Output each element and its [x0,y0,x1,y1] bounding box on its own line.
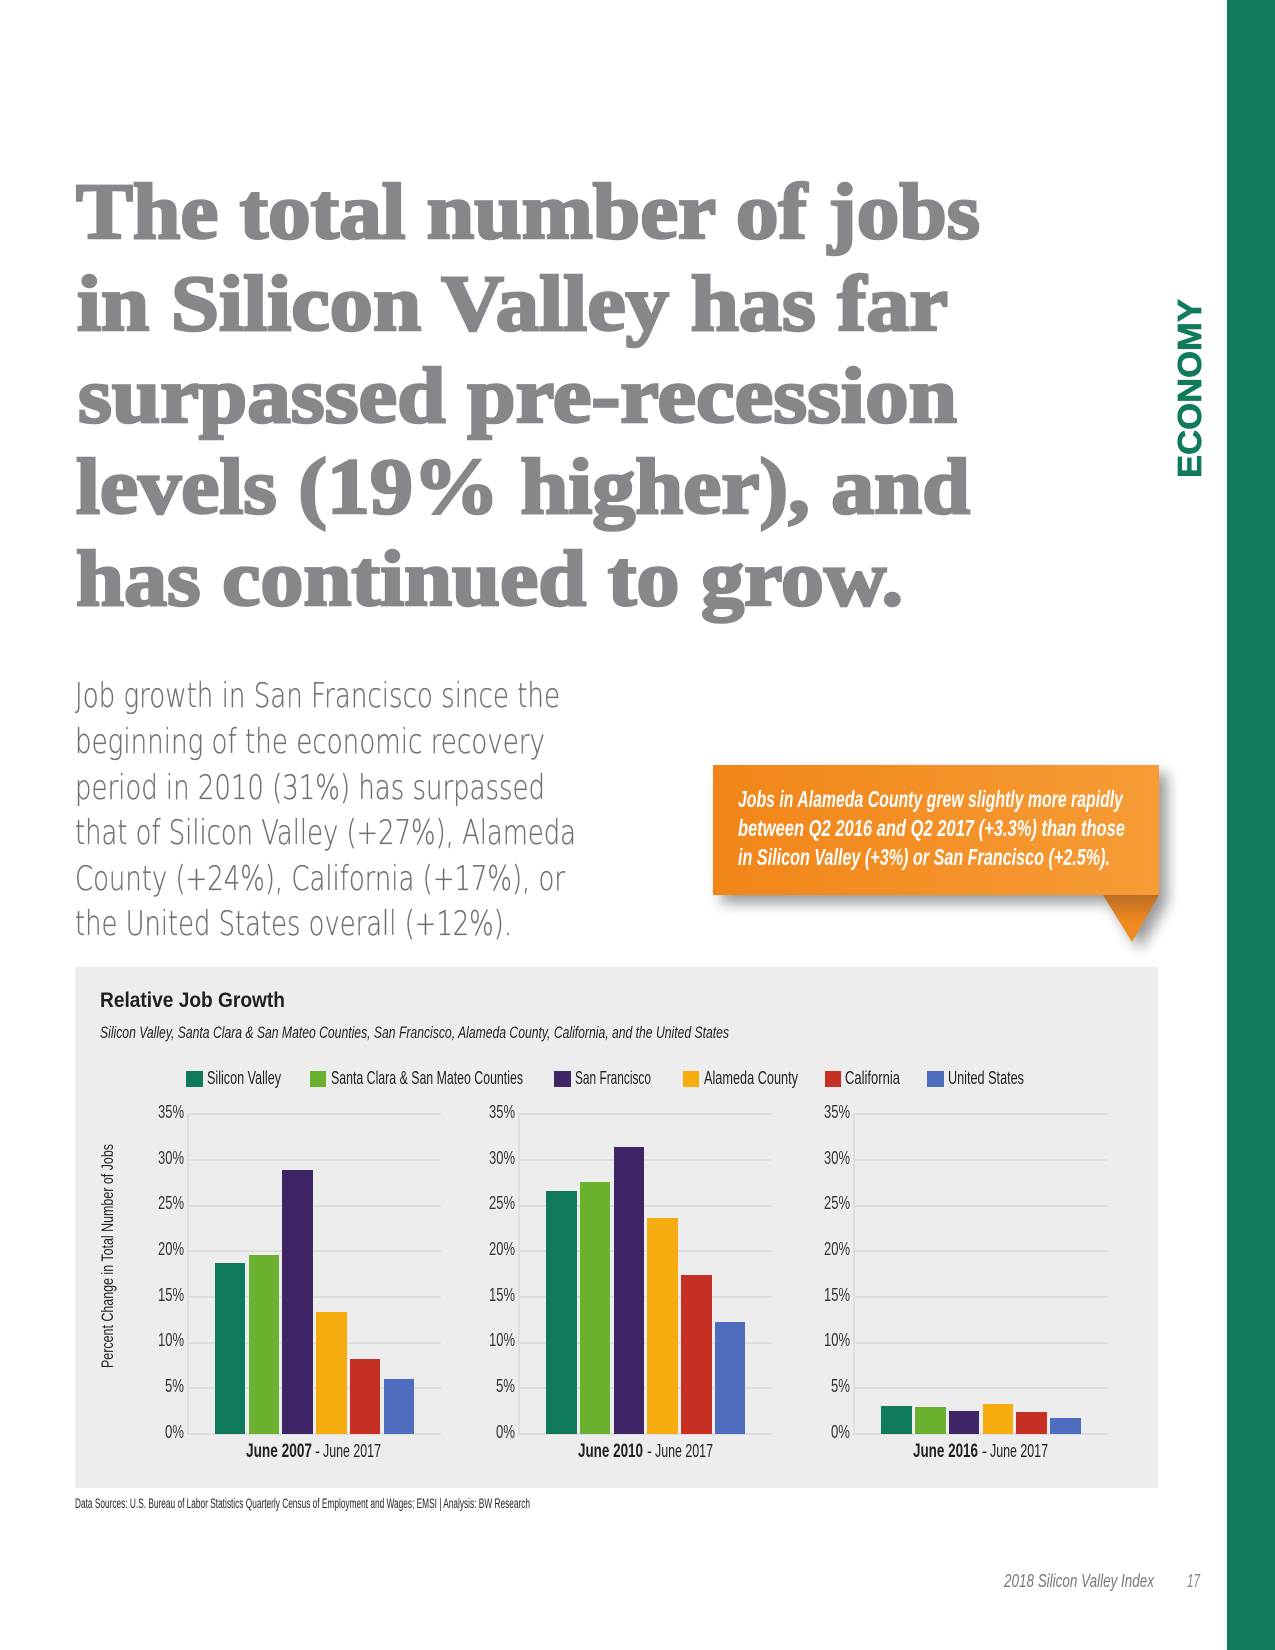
bar chart: June 2010 - June 2017: - [647,1441,652,1461]
data sources note: Data Sources: U.S. Bureau of Labor Statistics Quarterly Census of Employment and Wages; EMSI | Analysis: BW Research [75,1496,530,1511]
callout [713,765,1167,950]
bar chart: June 2007 - June 2017: - [315,1441,320,1461]
bar chart: June 2016 - June 2017: June 2016 [913,1441,978,1462]
bar chart: June 2016 - June 2017: 5% [831,1376,850,1396]
bar chart: June 2010 - June 2017: 0% [496,1422,515,1442]
bar chart: June 2007 - June 2017: 5% [165,1376,184,1396]
body text: County (+24%), California (+17%), or [75,859,565,899]
body text [75,676,576,944]
bars: 2007 [215,1170,414,1434]
bar chart: June 2016 - June 2017: 25% [824,1193,850,1213]
bar chart: June 2016 - June 2017: 35% [824,1102,850,1122]
body text: beginning of the economic recovery [75,722,545,762]
chart title: Relative Job Growth [100,989,285,1012]
section label: ECONOMY: ECONOMY [1171,299,1208,478]
bar chart: June 2010 - June 2017: 10% [489,1330,515,1350]
legend: United States [948,1068,1024,1088]
bar chart: June 2010 - June 2017 [489,1102,772,1462]
headline: in Silicon Valley has far [77,261,948,348]
footer: publication name: 2018 Silicon Valley Index [1003,1571,1155,1591]
legend: Alameda County [704,1068,798,1088]
bar chart: June 2016 - June 2017: 20% [824,1239,850,1259]
panel: chart background [75,967,1158,1488]
sidebar: green band [1227,0,1275,1650]
legend: Silicon Valley [207,1068,281,1088]
headline: levels (19% higher), and [76,444,970,531]
footer: page number: 17 [1187,1571,1201,1591]
callout: in Silicon Valley (+3%) or San Francisco (+2.5%). [738,844,1110,870]
bar chart: June 2007 - June 2017: 30% [158,1148,184,1168]
bar chart: June 2016 - June 2017: - [982,1441,987,1461]
bar chart: June 2007 - June 2017: June 2017 [323,1441,381,1461]
body text: that of Silicon Valley (+27%), Alameda [75,813,576,853]
bars: 2016 [881,1404,1081,1434]
headline: The total number of jobs [76,169,980,256]
legend [186,1068,1024,1088]
bar chart: June 2007 - June 2017: 35% [158,1102,184,1122]
body text: the United States overall (+12%). [75,904,512,944]
bar chart: June 2010 - June 2017: 35% [489,1102,515,1122]
bar chart: June 2007 - June 2017 [158,1102,441,1462]
callout: between Q2 2016 and Q2 2017 (+3.3%) than those [738,815,1125,841]
bar chart: June 2010 - June 2017: 30% [489,1148,515,1168]
body text: period in 2010 (31%) has surpassed [75,768,545,808]
bar chart: June 2010 - June 2017: 20% [489,1239,515,1259]
bar chart: June 2016 - June 2017: June 2017 [990,1441,1048,1461]
headline [76,169,980,623]
bar chart: June 2007 - June 2017: 25% [158,1193,184,1213]
bar chart: June 2016 - June 2017: 30% [824,1148,850,1168]
bar chart: June 2010 - June 2017: 25% [489,1193,515,1213]
bar chart: June 2016 - June 2017 [824,1102,1108,1462]
bar chart: June 2007 - June 2017: 15% [158,1285,184,1305]
bar chart: June 2010 - June 2017: June 2017 [655,1441,713,1461]
y-axis title: Percent Change in Total Number of Jobs [98,1144,117,1368]
bar chart: June 2007 - June 2017: 20% [158,1239,184,1259]
legend: San Francisco [575,1068,651,1088]
chart subtitle: Silicon Valley, Santa Clara & San Mateo Counties, San Francisco, Alameda County, California, and the United States [100,1023,729,1042]
body text: Job growth in San Francisco since the [75,676,560,716]
bar chart: June 2010 - June 2017: 5% [496,1376,515,1396]
bar chart: June 2016 - June 2017: 15% [824,1285,850,1305]
legend: California [845,1068,901,1088]
bars: 2010 [546,1147,745,1434]
bar chart: June 2007 - June 2017: 10% [158,1330,184,1350]
legend: Santa Clara & San Mateo Counties [331,1068,523,1088]
headline: has continued to grow. [76,536,903,623]
bar chart: June 2007 - June 2017: 0% [165,1422,184,1442]
bar chart: June 2007 - June 2017: June 2007 [246,1441,312,1462]
bar chart: June 2010 - June 2017: 15% [489,1285,515,1305]
bar chart: June 2016 - June 2017: 0% [831,1422,850,1442]
bar chart: June 2010 - June 2017: June 2010 [578,1441,643,1462]
bar chart: June 2016 - June 2017: 10% [824,1330,850,1350]
headline: surpassed pre-recession [78,353,957,440]
